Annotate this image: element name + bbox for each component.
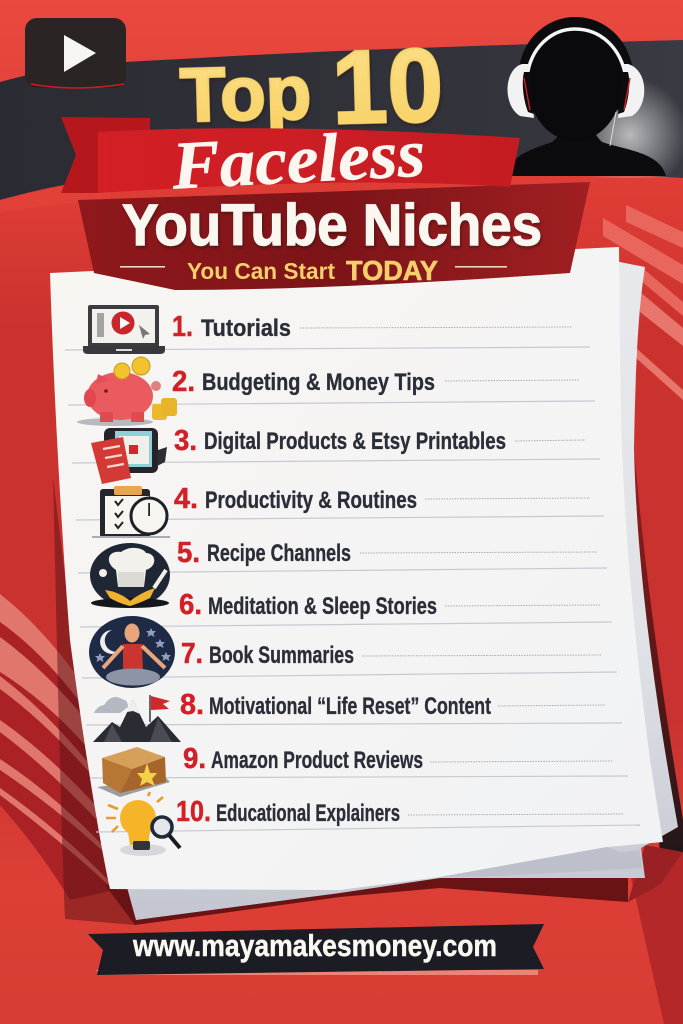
icon: box with star [97,747,170,797]
maroon banner [78,182,590,290]
icon: meditation [89,616,175,688]
list row 7: Book Summaries: 7. [181,638,203,670]
list row 2: Budgeting: 2. [172,366,195,398]
background stripes right [603,205,683,400]
list row 7: Book Summaries [181,638,602,670]
list row 1: Tutorials [172,311,572,343]
heading: Top 10: Top [179,50,312,138]
ruled lines [65,347,640,832]
list row 10: Educational: 10. [176,796,211,828]
list row 8: Motivational: Motivational “Life Reset” Content [209,693,491,720]
heading: Faceless: Faceless [169,115,427,204]
subheading: You Can Start TODAY: You Can Start [187,258,335,284]
heading: Top 10: 10 [330,28,444,146]
list row 9: Amazon [183,743,613,775]
list row 9: Amazon: Amazon Product Reviews [211,747,423,774]
list row 4: Productivity [174,483,590,515]
icon: laptop [83,305,165,354]
subheading: You Can Start TODAY [120,255,507,286]
icon: mountain and flag [93,695,181,742]
back paper sheets [125,258,678,920]
list row 4: Productivity: 4. [174,483,198,515]
footer url ribbon [88,924,544,975]
lower right dark shade [627,840,683,1024]
list row 5: Recipe Channels: 5. [177,537,200,569]
list row 3: Digital Products: 3. [174,425,197,457]
list row 7: Book Summaries: Book Summaries [209,642,354,669]
list row 8: Motivational: 8. [180,689,204,721]
background stripes left [0,594,115,900]
list row 1: Tutorials: Tutorials [201,315,291,342]
list row 9: Amazon: 9. [183,743,206,775]
list row 2: Budgeting [172,366,580,398]
icon: checklist and stopwatch [92,486,170,538]
red ribbon [98,128,520,193]
ribbon tail [61,117,150,193]
list row 6: Meditation [179,589,600,621]
headset silhouette [507,17,666,176]
list row 3: Digital Products: Digital Products & Etsy Printables [204,428,506,455]
list row 5: Recipe Channels: Recipe Channels [207,540,351,567]
list row 6: Meditation: 6. [179,589,202,621]
list row 4: Productivity: Productivity & Routines [205,487,417,514]
heading: YouTube Niches: YouTube Niches [122,193,542,258]
list row 1: Tutorials: 1. [172,311,193,343]
shadows under papers [53,448,683,925]
list row 6: Meditation: Meditation & Sleep Stories [208,593,437,620]
icon: tablet and planner [91,428,167,484]
footer url ribbon: www.mayamakesmoney.com [132,928,497,963]
play button icon [25,18,126,88]
list row 2: Budgeting: Budgeting & Money Tips [202,369,435,396]
main paper with lines [50,247,663,890]
icon: chef circle [90,543,170,608]
subheading: You Can Start TODAY: TODAY [346,255,438,286]
icon: light bulb and magnifier [106,792,180,856]
red band under swoosh [0,182,110,212]
heading: Top 10 [179,28,444,150]
list row 10: Educational: Educational Explainers [216,800,400,827]
list row 5: Recipe Channels [177,537,597,569]
icon: piggy bank [77,357,177,426]
silhouette glow [570,78,683,178]
list row 10: Educational [176,796,623,828]
dark swoosh header band [0,40,683,200]
